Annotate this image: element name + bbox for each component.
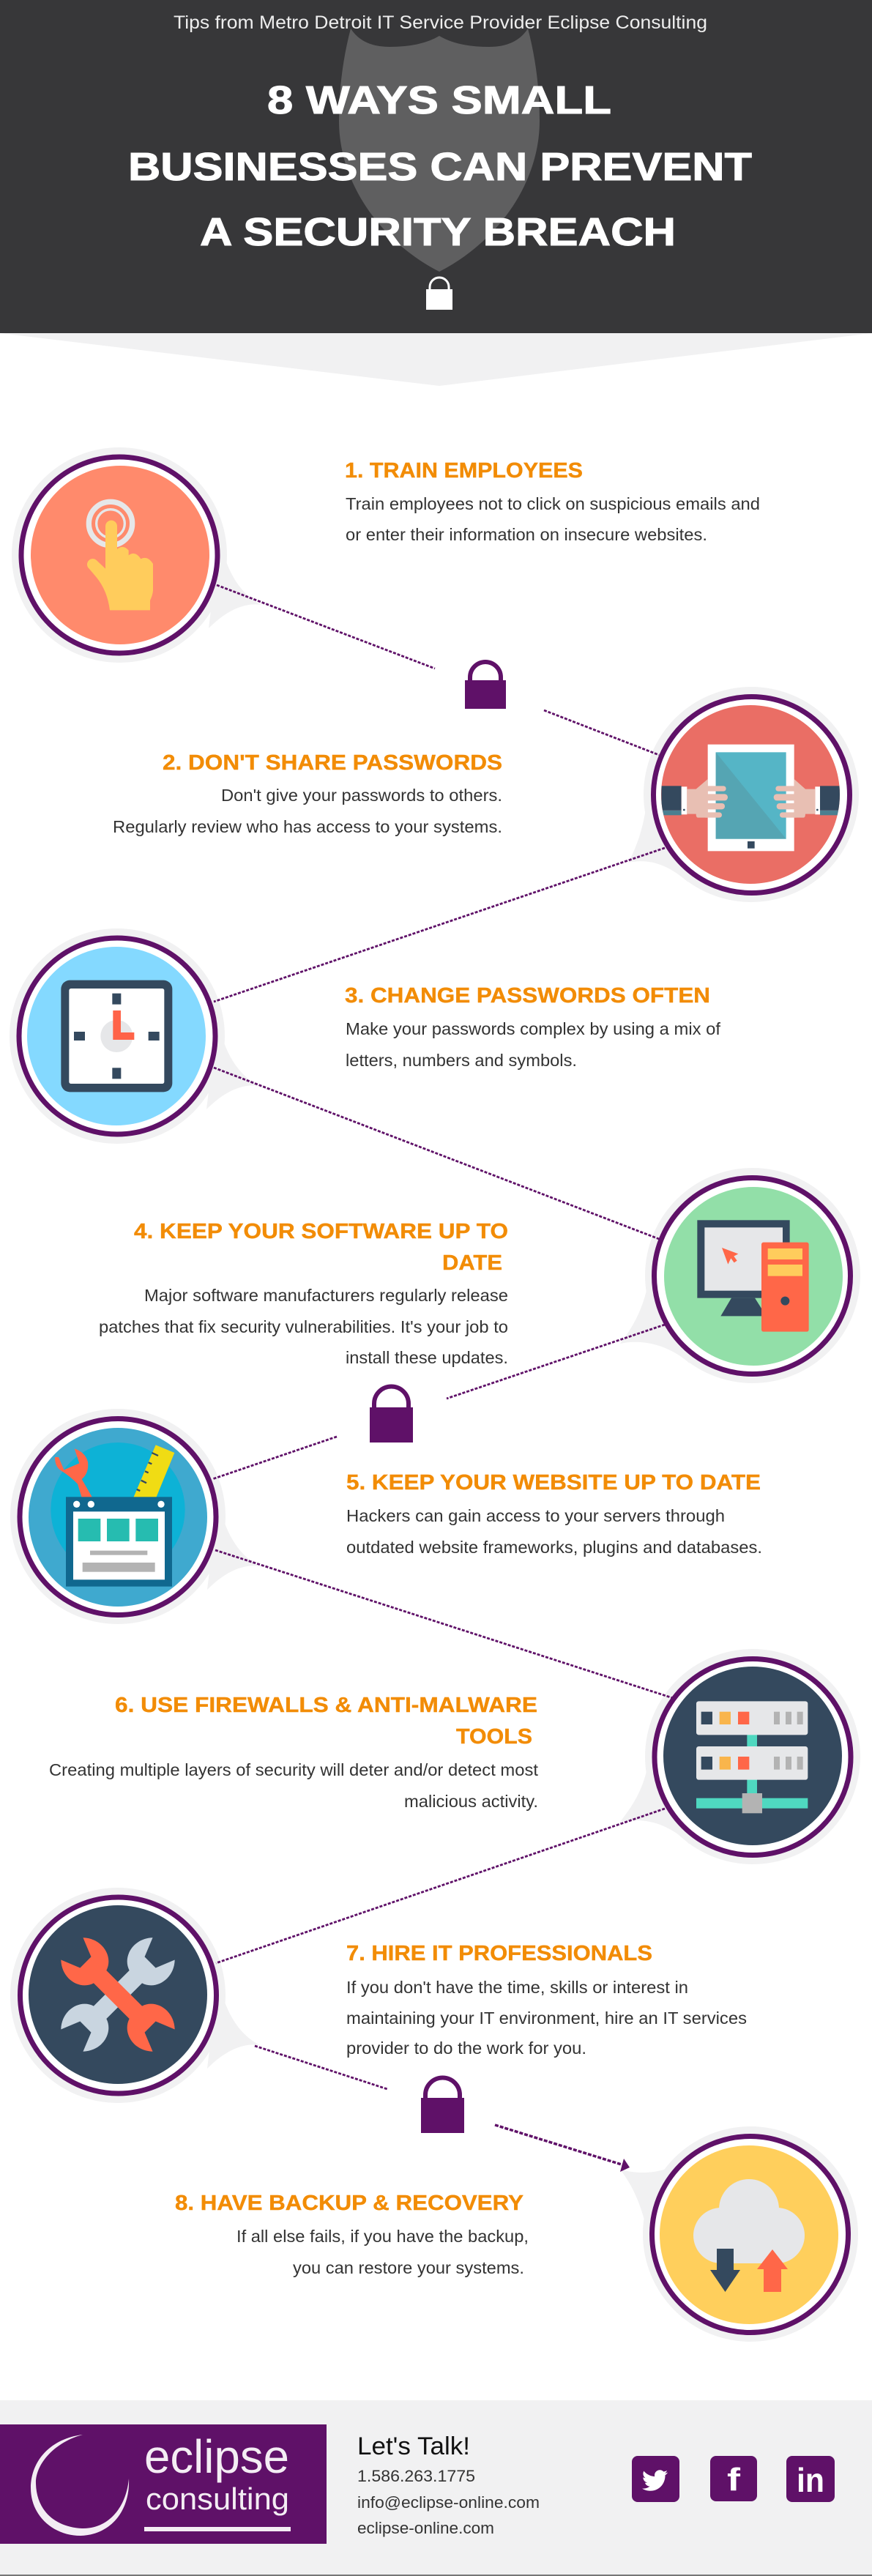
step 7 text (346, 1942, 747, 2058)
step 3 text (345, 984, 721, 1070)
step 4 badge (620, 1168, 860, 1383)
step 5 text: outdated website frameworks, plugins and databases. (346, 1538, 762, 1557)
step 7 badge (10, 1888, 260, 2103)
title: A SECURITY BREACH (200, 210, 676, 254)
icon: shield (339, 29, 540, 272)
step 3 badge (10, 928, 259, 1144)
header panel (0, 0, 872, 333)
header pointer triangle (0, 333, 872, 386)
icon: linkedin: in (797, 2461, 824, 2499)
footer panel (0, 2400, 872, 2576)
step 8 text: 8. HAVE BACKUP & RECOVERY (175, 2192, 523, 2215)
arrow: lock to step 8 (495, 2125, 630, 2172)
step 8 badge (620, 2126, 858, 2342)
connector: step 2 to step 3 (214, 848, 665, 1002)
logo: eclipse consulting: eclipse (144, 2430, 289, 2483)
icon: desktop computer (697, 1220, 809, 1332)
step 2 text (113, 751, 502, 836)
connector: step 6 to step 7 (216, 1809, 665, 1963)
connector: step 1 to lock (217, 585, 435, 669)
step 1 text: Train employees not to click on suspicious emails and (346, 494, 760, 513)
step 6 text: 6. USE FIREWALLS & ANTI-MALWARE (115, 1694, 537, 1717)
icon: touch hand (87, 502, 153, 610)
step 3 text: letters, numbers and symbols. (346, 1051, 577, 1070)
step 6 text: Creating multiple layers of security will deter and/or detect most (49, 1760, 539, 1779)
step 3 text: Make your passwords complex by using a mix of (346, 1019, 721, 1038)
connector: step 3 to step 4 (214, 1068, 659, 1239)
step 7 text: If you don't have the time, skills or interest in (346, 1978, 688, 1997)
step 4 text: DATE (442, 1251, 502, 1275)
step 8 text: If all else fails, if you have the backup, (236, 2227, 529, 2246)
step 4 text: patches that fix security vulnerabilities. It's your job to (99, 1317, 508, 1336)
step 6 text: malicious activity. (404, 1792, 538, 1811)
icon: tablet held by hands (661, 745, 841, 851)
step 2 text: Regularly review who has access to your systems. (113, 817, 502, 836)
step 4 text (99, 1220, 508, 1367)
icon: white lock (426, 278, 452, 310)
step 6 text (49, 1694, 539, 1811)
connector: lock to step 5 (212, 1437, 337, 1479)
contact details: info@eclipse-online.com (357, 2493, 540, 2512)
step 1 text (345, 459, 760, 544)
contact details: Let's Talk! (357, 2432, 470, 2460)
icon: server rack (696, 1701, 808, 1813)
step 3 text: 3. CHANGE PASSWORDS OFTEN (345, 984, 710, 1008)
step 1 text: 1. TRAIN EMPLOYEES (345, 459, 583, 483)
icon: facebook (710, 2456, 757, 2501)
step 1 badge (12, 447, 261, 663)
contact details: eclipse-online.com (357, 2519, 494, 2537)
connector: step 5 to step 6 (215, 1550, 673, 1698)
title (128, 78, 752, 254)
icon: facebook: f (727, 2462, 740, 2498)
subtitle: Tips from Metro Detroit IT Service Provider Eclipse Consulting (174, 12, 707, 33)
step 6 text: TOOLS (456, 1725, 532, 1749)
contact details (357, 2432, 540, 2537)
step 4 text: 4. KEEP YOUR SOFTWARE UP TO (134, 1220, 508, 1243)
connector: step 4 to lock (447, 1325, 665, 1399)
connector: step 7 to lock (255, 2046, 387, 2089)
step 6 badge (620, 1649, 860, 1864)
step 5 badge (10, 1409, 260, 1624)
lock icon 2 (370, 1386, 413, 1443)
step 1 text: or enter their information on insecure websites. (346, 525, 707, 544)
contact details: 1.586.263.1775 (357, 2467, 475, 2485)
step 5 text: Hackers can gain access to your servers through (346, 1506, 725, 1525)
title: BUSINESSES CAN PREVENT (128, 145, 752, 189)
step 2 text: 2. DON'T SHARE PASSWORDS (163, 751, 502, 775)
icon: crossed wrenches (56, 1932, 180, 2057)
lock icon 3 (421, 2077, 464, 2133)
step 5 text (346, 1471, 762, 1557)
step 4 text: install these updates. (346, 1348, 508, 1367)
connector: lock to step 2 (544, 710, 659, 755)
icon: twitter (632, 2456, 679, 2502)
icon: clock (61, 980, 172, 1092)
icon: website window with tools (51, 1443, 185, 1587)
icon: cloud backup (693, 2179, 805, 2292)
step 7 text: provider to do the work for you. (346, 2039, 586, 2058)
step 2 text: Don't give your passwords to others. (221, 786, 502, 805)
icon: linkedin (786, 2456, 835, 2502)
step 4 text: Major software manufacturers regularly release (144, 1286, 508, 1305)
step 7 text: maintaining your IT environment, hire an IT services (346, 2009, 747, 2028)
title: 8 WAYS SMALL (267, 78, 611, 122)
step 2 badge (628, 687, 859, 902)
step 5 text: 5. KEEP YOUR WEBSITE UP TO DATE (346, 1471, 761, 1494)
logo: eclipse consulting: consulting (146, 2482, 289, 2516)
step 8 text (175, 2192, 529, 2277)
step 8 text: you can restore your systems. (293, 2258, 524, 2277)
lock icon 1 (465, 662, 506, 709)
logo: eclipse consulting (0, 2424, 327, 2544)
step 7 text: 7. HIRE IT PROFESSIONALS (346, 1942, 652, 1965)
